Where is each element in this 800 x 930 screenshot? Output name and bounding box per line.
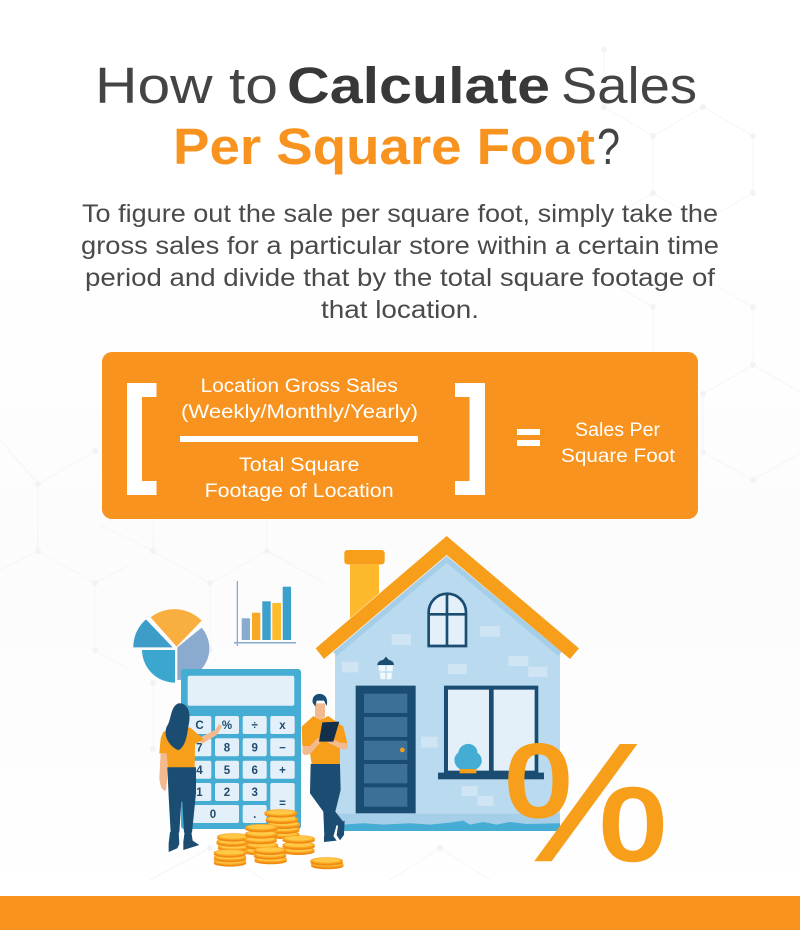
calculator: 1 [196, 787, 203, 799]
icon: pie chart [133, 609, 209, 683]
calculator: 0 [210, 809, 216, 821]
intro paragraph: period and divide that by the total square footage of [85, 264, 715, 292]
title: How to [95, 57, 278, 114]
result label: Sales Per [575, 420, 661, 441]
chimney [344, 550, 385, 618]
calculator: % [222, 720, 232, 732]
left bracket [127, 383, 156, 495]
calculator [181, 669, 301, 829]
calculator: ÷ [252, 720, 259, 732]
attic window [429, 594, 466, 646]
bar chart [234, 581, 296, 646]
calculator: 8 [224, 742, 231, 754]
calculator: . [253, 809, 256, 821]
calculator: 7 [196, 742, 203, 754]
calculator: 4 [196, 765, 203, 777]
coins [214, 809, 344, 869]
calculator: x [279, 720, 286, 732]
intro paragraph: that location. [321, 296, 479, 324]
figure: man [302, 694, 348, 842]
numerator: Location Gross Sales [201, 376, 398, 397]
intro paragraph [81, 200, 719, 324]
numerator: (Weekly/Monthly/Yearly) [181, 402, 418, 423]
title: Sales [561, 57, 697, 114]
house wall [335, 557, 560, 813]
denominator: Footage of Location [205, 481, 394, 502]
title: Per Square Foot [173, 118, 595, 175]
title [95, 57, 697, 175]
result label [561, 420, 676, 467]
door [356, 686, 416, 813]
icon: percent sign: % [503, 710, 668, 896]
bottom bar [0, 896, 800, 930]
equals sign [517, 429, 540, 446]
calculator: − [279, 742, 286, 754]
panel: formula [102, 352, 698, 519]
figure: woman [159, 703, 222, 852]
plant [454, 744, 482, 773]
calculator: 5 [224, 765, 231, 777]
fraction bar [180, 436, 418, 442]
calculator: 6 [251, 765, 258, 777]
numerator [181, 376, 418, 423]
intro paragraph: gross sales for a particular store within a certain time [81, 232, 719, 260]
lamp [377, 657, 394, 679]
intro paragraph: To figure out the sale per square foot, simply take the [82, 200, 718, 228]
calculator: 2 [224, 787, 230, 799]
denominator: Total Square [239, 455, 360, 476]
right bracket [455, 383, 485, 495]
calculator: 3 [251, 787, 258, 799]
denominator [205, 455, 394, 502]
calculator: 9 [251, 742, 258, 754]
title: ? [597, 118, 620, 175]
calculator: + [279, 765, 286, 777]
title: Calculate [287, 57, 550, 114]
calculator: = [279, 798, 286, 810]
front window [438, 686, 544, 779]
calculator: C [195, 720, 204, 732]
roof [316, 536, 579, 659]
result label: Square Foot [561, 446, 676, 467]
house [316, 536, 579, 831]
